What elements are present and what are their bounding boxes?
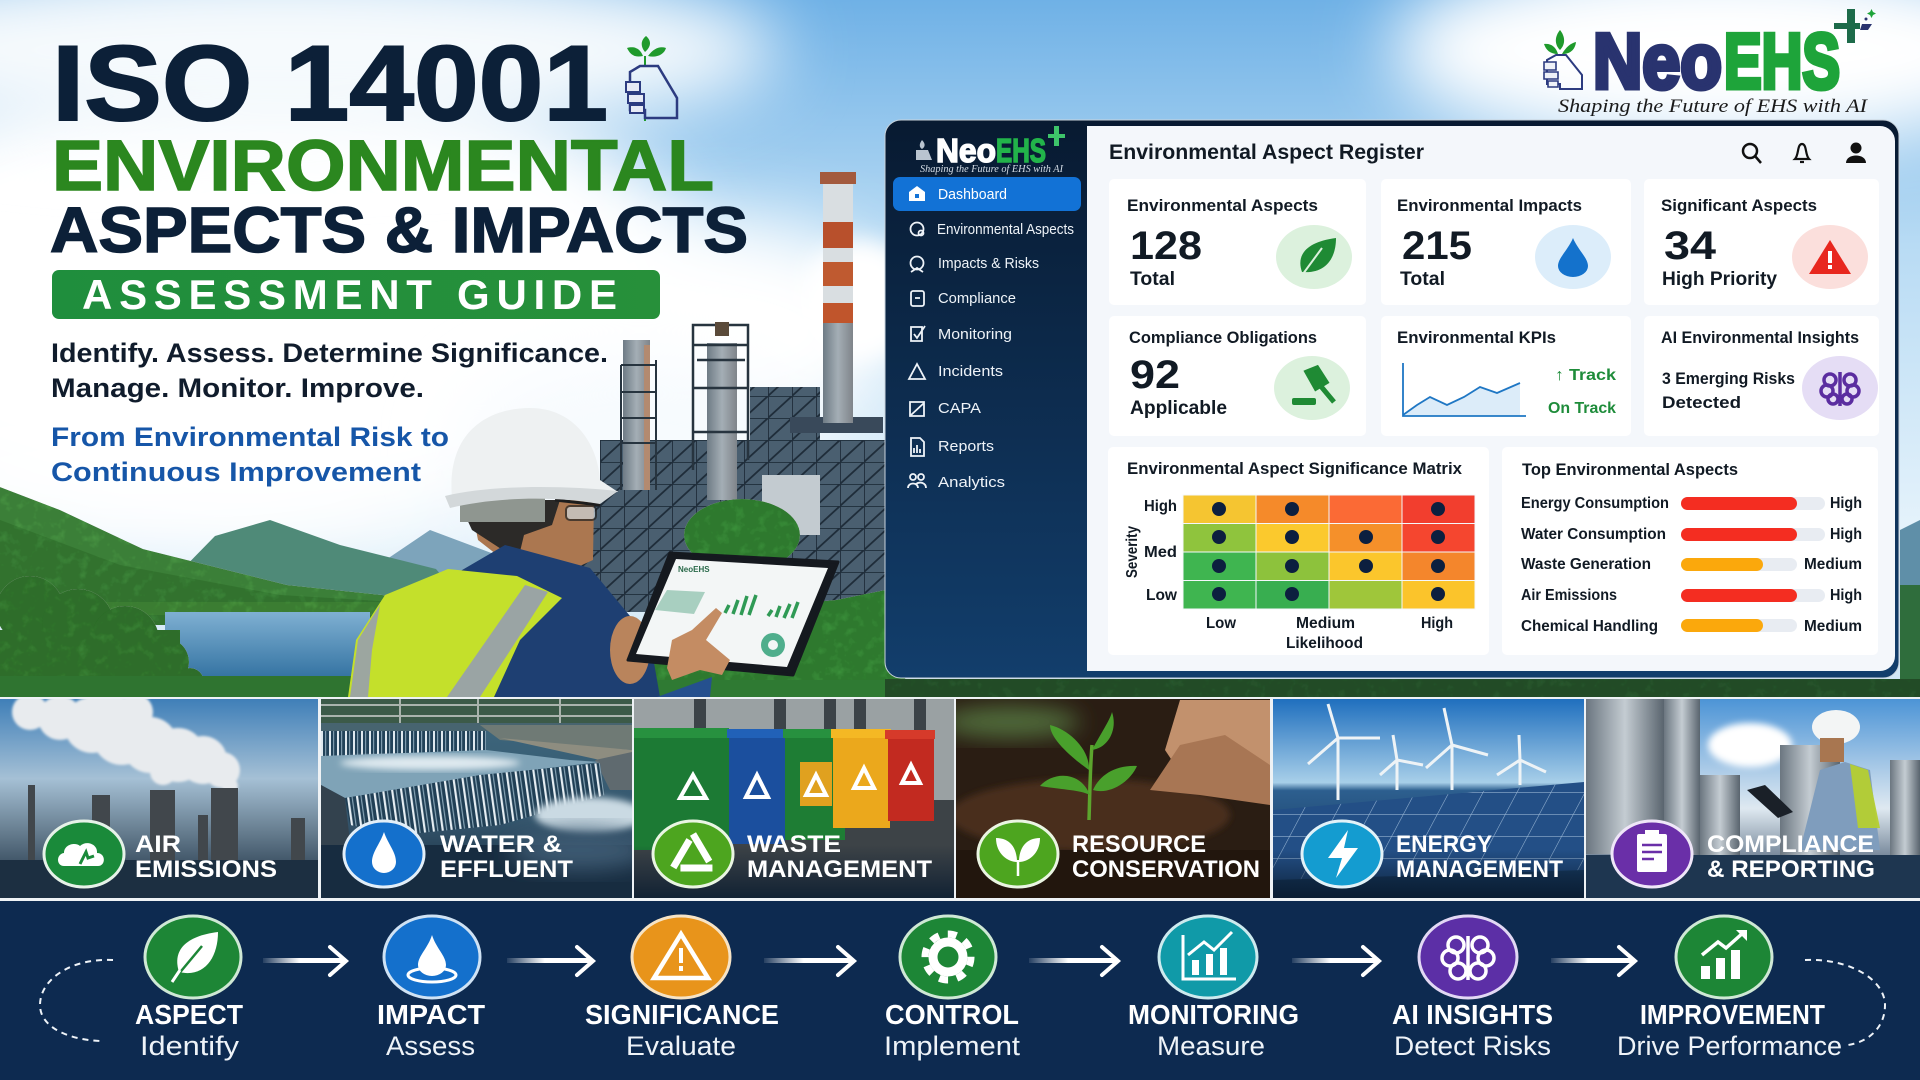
axis labels: Low xyxy=(1146,587,1178,604)
step: AI insights: AI INSIGHTS xyxy=(1392,999,1553,1030)
label: COMPLIANCE xyxy=(1707,831,1874,858)
step: control xyxy=(884,916,1021,1061)
step: impact: IMPACT xyxy=(377,999,485,1030)
icon: lightning bolt xyxy=(1302,821,1382,887)
heading: register title: Environmental Aspect Register xyxy=(1109,141,1424,164)
step: significance: Evaluate xyxy=(626,1031,736,1061)
arrow xyxy=(507,947,593,975)
panel: top environmental aspects xyxy=(1502,447,1878,655)
card: environmental KPIs: ↑ Track xyxy=(1555,367,1616,384)
step: monitoring: MONITORING xyxy=(1128,999,1299,1030)
line chart xyxy=(1403,363,1526,416)
card: environmental impacts: Environmental Impacts xyxy=(1397,196,1582,215)
icon: cloud xyxy=(44,821,124,887)
panel: compliance and reporting xyxy=(1586,699,1920,898)
tall striped chimney xyxy=(820,172,856,423)
arrow xyxy=(1029,947,1118,975)
arrow xyxy=(1551,947,1635,975)
panel: energy management xyxy=(1273,699,1584,898)
tagline: Identify. Assess. Determine Significance. xyxy=(51,338,608,368)
panel: waste management xyxy=(634,699,954,898)
NeoEHS logo: Neo xyxy=(1593,17,1722,105)
step: control: CONTROL xyxy=(885,999,1019,1030)
nav: menu icons xyxy=(908,222,926,488)
high visibility vest xyxy=(348,569,562,697)
icon: brain badge xyxy=(1419,916,1517,998)
panel: dashboard xyxy=(885,120,1899,678)
axis labels: Low xyxy=(1206,615,1237,632)
label: WASTE xyxy=(747,831,841,858)
nav: menu items: Reports xyxy=(938,438,994,455)
deck and wall xyxy=(480,725,632,750)
card: environmental impacts xyxy=(1381,179,1631,305)
step: improvement: IMPROVEMENT xyxy=(1640,999,1825,1030)
label: AIR xyxy=(135,831,181,858)
NeoEHS logo: Shaping the Future of EHS with AI xyxy=(1558,96,1869,117)
card: AI insights: Detected xyxy=(1662,393,1741,412)
bar labels: Chemical Handling xyxy=(1521,618,1658,635)
icon: droplet xyxy=(344,821,424,887)
step: monitoring xyxy=(1128,916,1299,1061)
right hand xyxy=(667,608,730,680)
axis labels: Likelihood xyxy=(1286,635,1363,652)
icon: drop with ripple xyxy=(384,916,480,998)
card: AI insights: 3 Emerging Risks xyxy=(1662,369,1795,388)
card: compliance obligations: Applicable xyxy=(1130,398,1227,419)
photo: seedling in soil xyxy=(940,699,1270,898)
sidebar logo xyxy=(916,126,1065,175)
landscape: mountains, lake and trees xyxy=(0,487,600,700)
nav: menu items: Monitoring xyxy=(938,326,1012,343)
card: compliance obligations: 92 xyxy=(1130,353,1180,397)
icon: leaf xyxy=(1276,225,1352,289)
label: EMISSIONS xyxy=(135,856,277,883)
hard hat xyxy=(445,408,618,508)
card: environmental aspects xyxy=(1109,179,1366,305)
lower steel frame xyxy=(578,487,885,612)
card: compliance obligations: Compliance Obligations xyxy=(1129,328,1317,347)
label: RESOURCE xyxy=(1072,831,1206,858)
card: significant aspects: Significant Aspects xyxy=(1661,196,1817,215)
label xyxy=(1072,831,1260,883)
bar labels: Air Emissions xyxy=(1521,587,1617,604)
label: EFFLUENT xyxy=(440,856,573,883)
tagline xyxy=(51,338,608,403)
icon: leaf and hand logo xyxy=(626,36,677,121)
shirt xyxy=(420,545,660,697)
label xyxy=(1707,831,1875,883)
NeoEHS logo xyxy=(1544,9,1876,117)
icon: search xyxy=(1743,144,1761,163)
icon: plus sparkle xyxy=(1834,9,1876,43)
step: impact xyxy=(377,916,485,1061)
step: improvement: Drive Performance xyxy=(1617,1031,1842,1061)
icon: warning triangle xyxy=(1792,225,1868,289)
label: & REPORTING xyxy=(1707,856,1875,883)
bar values xyxy=(1681,497,1797,632)
icon: user xyxy=(1846,142,1866,163)
card: compliance obligations xyxy=(1109,316,1366,436)
sub tagline: From Environmental Risk to xyxy=(51,422,449,452)
bar labels: Waste Generation xyxy=(1521,556,1651,573)
tower A xyxy=(621,340,656,490)
panel: top environmental aspects: Top Environmental Aspects xyxy=(1522,460,1738,479)
step: aspect: ASPECT xyxy=(135,999,243,1030)
icon: chart badge xyxy=(1159,916,1257,998)
step: control: Implement xyxy=(884,1031,1021,1061)
nav: menu items: CAPA xyxy=(938,400,981,417)
foliage xyxy=(620,499,920,700)
card: environmental KPIs: Environmental KPIs xyxy=(1397,328,1556,347)
photo: wind turbines and solar xyxy=(1273,699,1584,898)
nav: menu items: Compliance xyxy=(938,290,1016,307)
panel: resource conservation xyxy=(940,699,1270,898)
tower B xyxy=(693,322,748,500)
bar labels: Energy Consumption xyxy=(1521,495,1669,512)
step: aspect xyxy=(135,916,243,1061)
icon: gear xyxy=(900,916,996,998)
axis labels: Med xyxy=(1144,544,1177,561)
bar tracks xyxy=(1681,497,1825,632)
card: significant aspects: High Priority xyxy=(1662,269,1777,290)
arrow xyxy=(1292,947,1379,975)
bar labels xyxy=(1521,495,1862,635)
bar labels: High xyxy=(1830,495,1862,512)
dashed loop: left xyxy=(40,960,113,1041)
nav: dashboard active xyxy=(893,177,1081,211)
icon: water drop xyxy=(1535,225,1611,289)
arrow xyxy=(764,947,854,975)
nav: menu items: Environmental Aspects xyxy=(937,221,1074,238)
axis labels xyxy=(1124,498,1453,652)
card: environmental aspects: Total xyxy=(1130,269,1175,290)
card: environmental aspects: Environmental Aspects xyxy=(1127,196,1318,215)
label: WATER & xyxy=(440,831,562,858)
icon: clipboard xyxy=(1612,821,1692,887)
axis labels: High xyxy=(1144,498,1177,515)
card: environmental impacts: 215 xyxy=(1402,224,1472,268)
upper falls xyxy=(321,731,486,756)
card: AI insights xyxy=(1644,316,1879,436)
icon: warning badge xyxy=(632,916,730,998)
axis labels: High xyxy=(1421,615,1453,632)
nav: menu items: Impacts & Risks xyxy=(938,255,1039,272)
panel: significance matrix: Environmental Aspect Significance Matrix xyxy=(1127,459,1463,478)
step: impact: Assess xyxy=(386,1031,475,1061)
nav: menu items: Analytics xyxy=(938,474,1005,491)
label: CONSERVATION xyxy=(1072,856,1260,883)
step: AI insights xyxy=(1392,916,1553,1061)
card: significant aspects xyxy=(1644,179,1879,305)
refinery plant xyxy=(560,172,920,700)
title: Aspects and Impacts: ASPECTS & IMPACTS xyxy=(50,194,748,266)
icon: growth badge xyxy=(1676,916,1772,998)
panel: water and effluent xyxy=(321,699,650,898)
nav: menu items: Incidents xyxy=(938,363,1003,380)
banner: assessment guide: ASSESSMENT GUIDE xyxy=(82,271,617,318)
sidebar xyxy=(893,126,1081,491)
label: MANAGEMENT xyxy=(1396,856,1563,883)
nav: menu items xyxy=(937,221,1074,491)
lower falls xyxy=(345,763,605,835)
card: significant aspects: 34 xyxy=(1664,224,1717,268)
step: improvement xyxy=(1617,916,1842,1061)
left hand xyxy=(610,616,650,684)
icon: brain xyxy=(1802,356,1878,420)
arrow xyxy=(263,947,346,975)
photo: smokestacks xyxy=(0,685,318,898)
photo: storage tanks and inspector xyxy=(1586,699,1920,898)
NeoEHS logo: EHS xyxy=(1724,17,1840,105)
right edge scenery xyxy=(885,520,1920,700)
bar labels: Water Consumption xyxy=(1521,526,1666,543)
label: ENERGY xyxy=(1396,831,1492,858)
heatmap dots xyxy=(1212,502,1445,601)
icon: hand with sprout xyxy=(1544,30,1582,89)
icon: bell xyxy=(1795,144,1809,162)
card: environmental KPIs xyxy=(1381,316,1631,436)
bar labels: High xyxy=(1830,587,1862,604)
hero background: sky and clouds xyxy=(0,0,1920,700)
label xyxy=(747,831,932,883)
tablet xyxy=(628,553,838,675)
nav: dashboard active: Dashboard xyxy=(938,186,1007,203)
card: environmental impacts: Total xyxy=(1400,269,1445,290)
icon: sprout xyxy=(978,821,1058,887)
sidebar logo: EHS xyxy=(996,132,1046,169)
label xyxy=(1396,831,1563,883)
step: AI insights: Detect Risks xyxy=(1394,1031,1551,1061)
tagline: Manage. Monitor. Improve. xyxy=(51,373,424,403)
card: environmental KPIs: On Track xyxy=(1548,400,1616,417)
sidebar logo: Shaping the Future of EHS with AI xyxy=(920,163,1064,175)
panel: process flow xyxy=(0,901,1920,1080)
bar labels: High xyxy=(1830,526,1862,543)
bar labels: Medium xyxy=(1804,618,1862,635)
step: monitoring: Measure xyxy=(1157,1031,1265,1061)
icon: leaf badge xyxy=(145,916,241,998)
step: aspect: Identify xyxy=(140,1031,240,1061)
bar labels: Medium xyxy=(1804,556,1862,573)
dashed loop: right xyxy=(1805,960,1885,1045)
axis labels: Medium xyxy=(1296,615,1355,632)
title: ISO 14001: ISO 14001 xyxy=(52,23,608,143)
icon: recycle xyxy=(653,821,733,887)
sub tagline xyxy=(51,422,449,487)
card: AI insights: AI Environmental Insights xyxy=(1661,328,1859,347)
photo: weir xyxy=(321,699,650,898)
strip background xyxy=(0,697,1920,901)
step: significance xyxy=(585,916,779,1061)
sidebar logo: Neo xyxy=(936,132,996,169)
photo: recycling bins xyxy=(634,699,954,898)
panel: significance matrix xyxy=(1108,447,1489,655)
label xyxy=(135,831,277,883)
worker with hard hat and tablet xyxy=(348,408,838,697)
icon: gavel xyxy=(1274,356,1350,420)
label: MANAGEMENT xyxy=(747,856,932,883)
title: Environmental: ENVIRONMENTAL xyxy=(52,127,714,206)
lakeside trees xyxy=(0,576,204,700)
label xyxy=(440,831,573,883)
tablet: NeoEHS xyxy=(678,565,710,574)
axis labels: Severity xyxy=(1124,526,1141,578)
sub tagline: Continuous Improvement xyxy=(51,457,421,487)
panel: air emissions xyxy=(0,685,318,898)
heatmap cells xyxy=(1183,495,1475,609)
step: significance: SIGNIFICANCE xyxy=(585,999,779,1030)
card: environmental aspects: 128 xyxy=(1130,224,1202,268)
